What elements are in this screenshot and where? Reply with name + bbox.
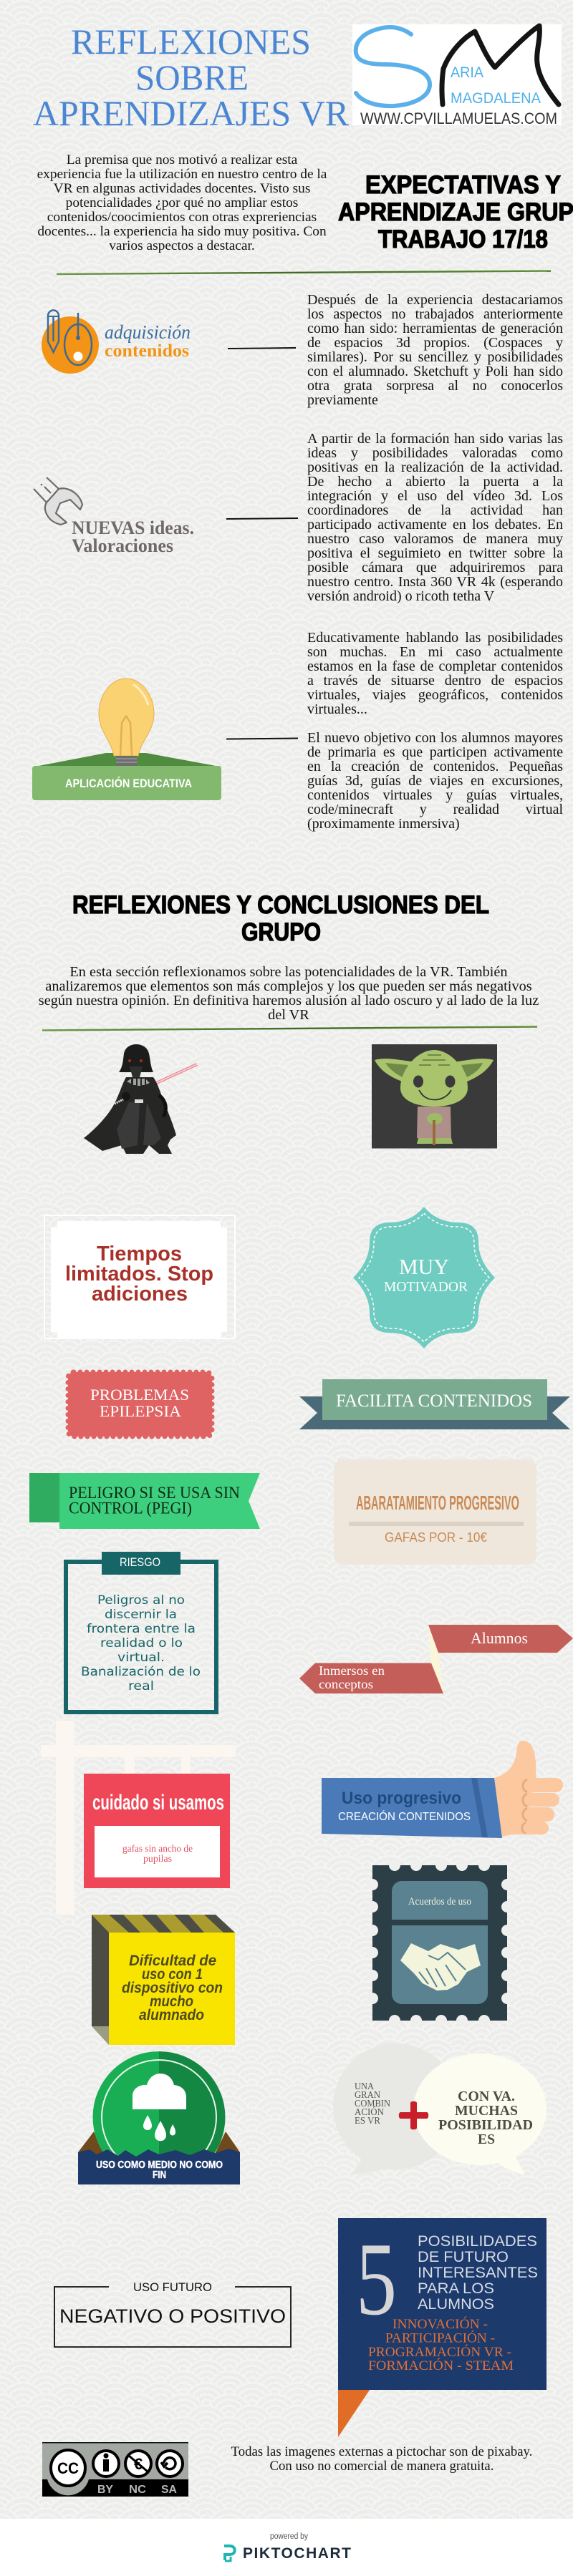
text: en esta seccion: En esta sección reflexionamos sobre las potencialidades de la VR. También [69, 964, 508, 980]
text: el nuevo objetivo: de primaria es que participen activamente [307, 744, 563, 760]
text: educativamente hablando: virtuales... [307, 701, 367, 717]
icon: nuevas ideas [34, 477, 194, 556]
speech bubbles: gran combinacion: COMBIN [355, 2099, 390, 2109]
text: despues de la experiencia: previamente [307, 392, 378, 408]
icon: adquisicion contenidos [42, 311, 191, 374]
text: despues de la experiencia: Después de la experiencia destacariamos [307, 292, 563, 308]
thumb: uso progresivo: CREACIÓN CONTENIDOS [338, 1811, 471, 1823]
icon: creative commons by nc sa: NC [129, 2484, 146, 2496]
text: a partir de la formacion: positiva el seguimieto en twitter sobre la [307, 545, 563, 561]
box: dificultad de uso: Dificultad de [129, 1953, 216, 1969]
medal: uso como medio: USO COMO MEDIO NO COMO [96, 2159, 223, 2171]
panel: riesgo: realidad o lo [100, 1636, 183, 1651]
panel: riesgo: Banalización de lo [81, 1665, 201, 1679]
speech bubbles: gran combinacion: ACIÓN [355, 2106, 384, 2118]
stamp: acuerdos de uso [367, 1860, 513, 2026]
heading: expectativas y aprendizaje: EXPECTATIVAS Y [365, 171, 561, 199]
thumb: uso progresivo: Uso progresivo [342, 1789, 461, 1808]
badge: muy motivador [353, 1207, 495, 1348]
icon: creative commons by nc sa [42, 2442, 188, 2497]
callout: 5 posibilidades de futuro: INNOVACIÓN - [393, 2316, 488, 2332]
callout: tiempos limitados [44, 1215, 235, 1338]
box: dificultad de uso: dispositivo con [122, 1980, 223, 1996]
intro paragraph: potencialidades ¿por qué no ampliar estos [66, 195, 298, 210]
text: el nuevo objetivo: en la creación de contenidos. Pequeñas [307, 759, 563, 774]
card: abaratamiento progresivo: GAFAS POR - 10€ [385, 1530, 487, 1545]
medal: uso como medio [78, 2051, 240, 2184]
text: educativamente hablando: virtuales, viajes geográficos, contenidos [307, 687, 563, 703]
text: el nuevo objetivo: guías 3d, guías de viajes en excursiones, [307, 773, 563, 789]
box: dificultad de uso: mucho [150, 1993, 193, 2010]
text: a partir de la formacion: ideas y posibilidades valoradas como [307, 445, 563, 461]
text: despues de la experiencia: otra grata sorpresa al no conocerlos [307, 378, 563, 394]
panel: riesgo: discernir la [105, 1608, 177, 1622]
callout: tiempos limitados: adiciones [92, 1283, 188, 1306]
heading: reflexiones y conclusiones: GRUPO [241, 918, 321, 946]
panel: riesgo: Peligros al no [97, 1593, 185, 1608]
ribbons: alumnos inmersos en conceptos [299, 1625, 573, 1693]
intro paragraph: varios aspectos a destacar. [109, 238, 255, 253]
logo: Santa Maria Magdalena: ARIA [451, 64, 483, 81]
callout: 5 posibilidades de futuro: INTERESANTES [418, 2265, 538, 2281]
text: educativamente hablando: a través de situarse dentro de espacios [307, 673, 563, 689]
title: REFLEXIONES [71, 21, 311, 62]
text: despues de la experiencia: como han sido: herramientas de generación [307, 321, 563, 336]
intro paragraph: La premisa que nos motivó a realizar esta [67, 152, 297, 167]
medal: uso como medio: FIN [153, 2169, 166, 2181]
sign: cuidado si usamos: cuidado si usamos [92, 1791, 224, 1814]
title: SOBRE [135, 57, 249, 97]
text: el nuevo objetivo: (proximamente inmersiva) [307, 816, 460, 832]
text: a partir de la formacion: De hecho a abierto la puerta a la [307, 474, 563, 490]
ribbon: peligro pegi: CONTROL (PEGI) [69, 1499, 192, 1517]
box: dificultad de uso: alumnado [139, 2007, 204, 2023]
footer: piktochart: PIKTOCHART [243, 2545, 351, 2562]
stamp: acuerdos de uso: Acuerdos de uso [408, 1896, 471, 1907]
text: a partir de la formacion: participado activamente en los debates. En [307, 517, 563, 533]
text: el nuevo objetivo: contenidos virtuales y guías virtuales, [307, 787, 563, 803]
icon: bombilla aplicacion educativa: APLICACIÓN EDUCATIVA [65, 777, 192, 790]
sign: cuidado si usamos: pupilas [143, 1854, 172, 1865]
text: despues de la experiencia: similares). Por su sencillez y posibilidades [307, 349, 563, 365]
logo: Santa Maria Magdalena: MAGDALENA [451, 90, 541, 107]
box: dificultad de uso: uso con 1 [142, 1966, 203, 1983]
speech bubbles: gran combinacion: GRAN [355, 2090, 380, 2101]
text: a partir de la formacion: A partir de la formación han sido varias las [307, 431, 563, 447]
icon: darth vader [84, 1044, 197, 1154]
title [33, 21, 350, 133]
thumb: uso progresivo [322, 1741, 563, 1838]
badge: problemas epilepsia [68, 1372, 212, 1437]
text: a partir de la formacion: nuestro caso valoramos de manera muy [307, 531, 563, 547]
icon: adquisicion contenidos: adquisición [105, 321, 191, 343]
speech bubbles: gran combinacion: ES VR [355, 2116, 381, 2127]
text: educativamente hablando: Educativamente hablando las posibilidades [307, 630, 563, 646]
panel: riesgo [66, 1552, 216, 1712]
text: educativamente hablando: son muchas. En mi caso actualmente [307, 644, 563, 660]
ribbons: alumnos inmersos en conceptos: Inmersos en [319, 1663, 385, 1678]
ribbons: alumnos inmersos en conceptos: Alumnos [471, 1629, 528, 1647]
heading: expectativas y aprendizaje: TRABAJO 17/18 [378, 225, 548, 253]
icon: creative commons by nc sa: CC [57, 2459, 79, 2477]
text: despues de la experiencia [307, 292, 563, 408]
text: el nuevo objetivo: code/minecraft y realidad virtual [307, 802, 563, 817]
heading: expectativas y aprendizaje [338, 171, 573, 253]
speech bubbles: gran combinacion: UNA [355, 2081, 375, 2092]
sign: cuidado si usamos [41, 1721, 236, 1915]
callout: tiempos limitados: limitados. Stop [65, 1263, 213, 1285]
callout: 5 posibilidades de futuro: PARA LOS [418, 2280, 494, 2297]
ribbon: facilita contenidos [299, 1379, 570, 1429]
card: abaratamiento progresivo [334, 1459, 536, 1565]
icon: creative commons by nc sa: SA [161, 2484, 177, 2496]
text: despues de la experiencia: de espacios 3d propios. (Cospaces y [307, 335, 563, 351]
icon: creative commons by nc sa: BY [97, 2484, 113, 2496]
text: en esta seccion: del VR [268, 1007, 309, 1023]
text: credito de imagenes [231, 2444, 532, 2474]
badge: muy motivador: MOTIVADOR [384, 1279, 468, 1295]
panel: riesgo: frontera entre la [87, 1622, 196, 1636]
text: despues de la experiencia: los aspectos no trabajados anteriormente [307, 306, 563, 322]
logo: Santa Maria Magdalena: WWW.CPVILLAMUELAS.COM [360, 110, 557, 127]
text: en esta seccion [39, 964, 539, 1023]
panel: riesgo: RIESGO [120, 1555, 160, 1569]
intro paragraph: experiencia fue la utilización en nuestro centro de la [37, 166, 327, 182]
ribbon: facilita contenidos: FACILITA CONTENIDOS [336, 1391, 532, 1411]
intro paragraph [37, 152, 327, 253]
text: a partir de la formacion: versión android) o ricoth tetha V [307, 588, 494, 604]
speech bubbles: gran combinacion: CON VA. [458, 2089, 515, 2104]
panel: riesgo: real [128, 1679, 154, 1693]
badge: problemas epilepsia: PROBLEMAS [90, 1386, 189, 1404]
speech bubbles: gran combinacion: POSIBILIDAD [438, 2118, 533, 2133]
text: en esta seccion: analizaremos que elementos son más complejos y los que pueden ser más negativos [45, 978, 532, 994]
callout: 5 posibilidades de futuro: PROGRAMACIÓN VR - [368, 2344, 511, 2360]
text: a partir de la formacion: positivas en la realización de la actividad. [307, 460, 563, 475]
icon: bombilla aplicacion educativa [32, 679, 221, 800]
ribbon: peligro pegi [29, 1473, 260, 1529]
callout: tiempos limitados: Tiempos [97, 1243, 182, 1265]
intro paragraph: contenidos/coocimientos con otras expreriencias [47, 209, 317, 225]
callout: 5 posibilidades de futuro: ALUMNOS [418, 2296, 494, 2313]
badge: problemas epilepsia: EPILEPSIA [100, 1402, 181, 1420]
ribbons: alumnos inmersos en conceptos: conceptos [319, 1677, 373, 1691]
sign: cuidado si usamos: gafas sin ancho de [122, 1844, 193, 1855]
icon: creative commons by nc sa: € [134, 2455, 143, 2473]
speech bubbles: gran combinacion: MUCHAS [455, 2104, 518, 2119]
ribbon: peligro pegi: PELIGRO SI SE USA SIN [69, 1484, 240, 1502]
box: dificultad de uso [92, 1915, 235, 2045]
callout: 5 posibilidades de futuro: FORMACIÓN - STEAM [368, 2358, 514, 2373]
intro paragraph: docentes... la experiencia ha sido muy positiva. Con [37, 223, 327, 239]
text: despues de la experiencia: con el alumnado. Sketchuft y Poli han sido [307, 364, 563, 379]
text: a partir de la formacion: posible cámara que adquiriremos para [307, 560, 563, 575]
text: el nuevo objetivo: El nuevo objetivo con los alumnos mayores [307, 730, 563, 746]
heading: reflexiones y conclusiones [72, 891, 489, 946]
text: credito de imagenes: Todas las imagenes externas a pictochar son de pixabay. [231, 2444, 532, 2459]
text: a partir de la formacion: integración y el uso del vídeo 3d. Los [307, 488, 563, 504]
text: en esta seccion: según nuestra opinión. En definitiva haremos alusión al lado oscuro y al lado de la luz [39, 993, 539, 1008]
text: el nuevo objetivo [307, 730, 563, 832]
callout: 5 posibilidades de futuro: 5 [356, 2221, 397, 2337]
text: educativamente hablando: estamos en la fase de completar contenidos [307, 658, 563, 674]
callout: 5 posibilidades de futuro: DE FUTURO [418, 2249, 509, 2265]
icon: nuevas ideas: NUEVAS ideas. [72, 517, 194, 538]
icon: nuevas ideas: Valoraciones [72, 535, 173, 556]
text: a partir de la formacion [307, 431, 563, 604]
speech bubbles: gran combinacion: ES [478, 2132, 495, 2147]
intro paragraph: VR en algunas actividades docentes. Visto sus [54, 180, 310, 196]
callout: 5 posibilidades de futuro: PARTICIPACIÓN - [385, 2330, 495, 2346]
title: APRENDIZAJES VR [33, 93, 350, 133]
badge: muy motivador: MUY [399, 1254, 449, 1279]
footer: piktochart: powered by [270, 2532, 308, 2541]
heading: reflexiones y conclusiones: REFLEXIONES Y CONCLUSIONES DEL [72, 891, 489, 919]
callout: 5 posibilidades de futuro: POSIBILIDADES [418, 2233, 537, 2250]
text: a partir de la formacion: nuestro centro. Insta 360 VR 4k (esperando [307, 574, 563, 590]
speech bubbles: gran combinacion [333, 2043, 546, 2174]
callout: 5 posibilidades de futuro [338, 2218, 546, 2437]
text: credito de imagenes: Con uso no comercial de manera gratuita. [270, 2459, 493, 2474]
panel: riesgo: virtual. [117, 1651, 165, 1665]
icon: adquisicion contenidos: contenidos [105, 341, 189, 361]
footer: piktochart [224, 2532, 351, 2562]
frame: uso futuro [54, 2280, 291, 2347]
text: a partir de la formacion: coordinadores de la actividad han [307, 502, 563, 518]
text: educativamente hablando [307, 630, 563, 717]
frame: uso futuro: NEGATIVO O POSITIVO [59, 2305, 286, 2327]
icon: yoda [372, 1044, 497, 1148]
frame: uso futuro: USO FUTURO [133, 2280, 212, 2294]
logo: Santa Maria Magdalena [352, 24, 562, 127]
